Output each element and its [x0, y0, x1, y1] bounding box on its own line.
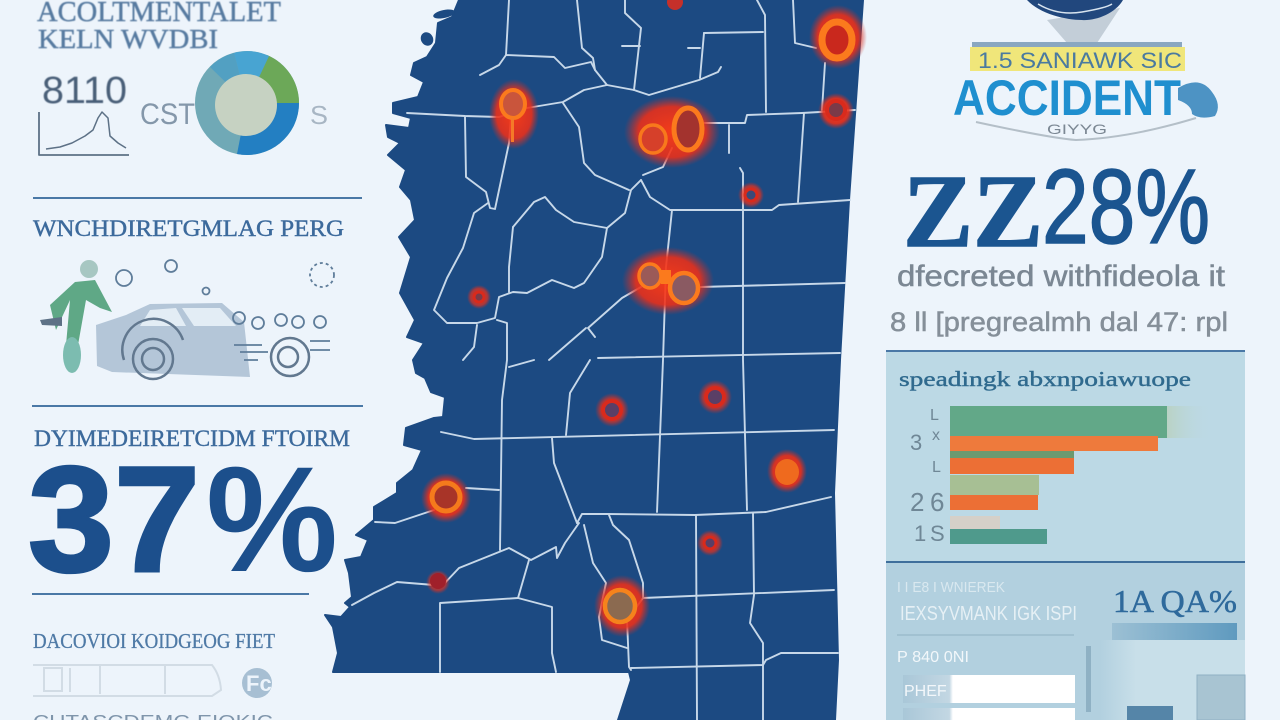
banner: yellow — [970, 42, 1185, 73]
caption: line one: dfecreted withfideola it — [897, 260, 1226, 293]
county boundary lines — [352, 0, 855, 720]
heading: bottom: DACOVIOI KOIDGEOG FIET — [33, 629, 275, 653]
hotspot: south small — [697, 530, 723, 556]
axis labels: 1 — [914, 521, 926, 546]
white bars: PHEF — [904, 683, 947, 700]
banner: yellow: 1.5 SANIAWK SIC — [978, 48, 1182, 73]
bars — [950, 406, 1212, 544]
hotspot: south-west ring — [421, 473, 471, 523]
progress bar — [33, 665, 221, 696]
panel: right column — [886, 0, 1245, 720]
stat: lower percent: 1A QA% — [1113, 583, 1237, 619]
hotspot: small red — [738, 182, 764, 208]
stat: 37 percent: 37 — [28, 435, 200, 603]
axis labels: x — [932, 427, 940, 444]
hotspot: south-west dark — [426, 570, 450, 594]
debris icons — [116, 260, 334, 360]
hotspot: top edge — [667, 0, 683, 10]
hotspot: north-east small — [818, 93, 854, 129]
line chart — [39, 112, 129, 155]
hotspot: mid double ring — [622, 247, 714, 315]
person — [40, 260, 112, 373]
caption: line two: 8 ll [pregrealmh dal 47: rpl — [890, 307, 1228, 337]
white bars — [903, 675, 1075, 720]
donut chart — [195, 51, 299, 155]
hotspot: north-east large — [809, 5, 867, 69]
emblem — [1027, 0, 1123, 43]
icon: globe: Fc — [246, 671, 272, 696]
emblem badge — [1027, 0, 1123, 20]
stat: 37 percent — [28, 435, 338, 603]
accident hotspots — [421, 0, 867, 637]
lower panel text — [897, 579, 1077, 625]
axis labels — [910, 407, 945, 546]
car windows — [140, 308, 236, 326]
hotspot: south ring — [594, 575, 650, 637]
panel: speeding bar chart — [886, 350, 1245, 562]
illustration: person and car — [40, 260, 334, 379]
heading: percentage: DYIMEDEIRETCIDM FTOIRM — [34, 426, 350, 451]
stat: 28 percent: 28% — [1042, 148, 1210, 266]
lower panel background — [886, 562, 1245, 720]
stat: 28 percent — [903, 148, 1210, 269]
lower panel text: I I E8 I WNIEREK — [897, 579, 1005, 596]
wheel rear — [271, 338, 309, 376]
stat: 28 percent: ZZ — [903, 154, 1043, 269]
emblem curve — [976, 118, 1196, 140]
hotspot: central small right — [698, 380, 732, 414]
heading: top title — [37, 0, 281, 54]
hotspot: central small left — [595, 393, 629, 427]
chart heading: speadingk abxnpoiawuope — [899, 367, 1191, 391]
divider — [32, 405, 363, 407]
divider — [32, 593, 309, 595]
map of counties — [325, 0, 863, 720]
blob: region mark — [1178, 82, 1218, 118]
lower panel text: IEXSYVMANK IGK ISPI — [900, 603, 1077, 625]
map islands — [418, 8, 456, 48]
axis labels: S — [930, 521, 945, 546]
axis labels: 6 — [930, 487, 944, 517]
map landmass — [325, 0, 863, 720]
panel: lower stats — [886, 561, 1245, 720]
hotspot: central double ring — [624, 96, 720, 168]
stat: 37 percent: % — [206, 435, 338, 603]
stat: small number: 8110 — [42, 70, 127, 112]
donut label: S — [310, 100, 328, 130]
axis labels: 3 — [910, 430, 922, 455]
divider — [33, 197, 362, 199]
heading: top title: KELN WVDBI — [38, 24, 218, 54]
lower panel label: P 840 0NI — [897, 649, 969, 666]
lower panel divider — [897, 634, 1074, 636]
panel: left column — [28, 0, 363, 720]
emblem funnel — [1047, 8, 1120, 43]
hotspot: east solid — [767, 449, 807, 493]
chart label: CST — [140, 98, 195, 131]
hotspot: west small — [467, 285, 491, 309]
small mark: GIYYG — [1047, 121, 1107, 137]
axis labels: L — [932, 459, 941, 476]
building illustration — [1086, 623, 1245, 720]
axis labels: L — [930, 407, 939, 424]
wheel front — [122, 319, 183, 379]
hotspot: north-west ring — [489, 79, 539, 149]
heading: vehicle: WNCHDIRETGMLAG PERG — [33, 216, 344, 241]
title: accident: ACCIDENT — [953, 70, 1181, 126]
axis labels: 2 — [910, 487, 924, 517]
car body — [96, 303, 250, 377]
chart panel background — [886, 351, 1245, 562]
